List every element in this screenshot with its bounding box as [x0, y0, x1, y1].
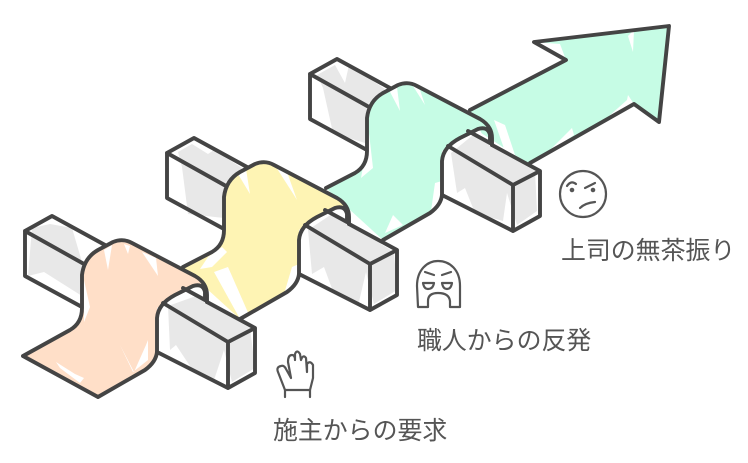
ribbon gaps: [361, 86, 442, 233]
orange step: [23, 216, 255, 397]
back block: [310, 59, 390, 150]
back block: [25, 216, 105, 307]
arrow: [470, 26, 669, 163]
ribbon gaps: [200, 167, 299, 319]
front block: [299, 208, 397, 310]
ribbon fill: [326, 83, 492, 240]
label: craftsmen: 職人からの反発: [417, 327, 591, 355]
label: boss: 上司の無茶振り: [561, 237, 735, 265]
icon: raised hand: [277, 352, 313, 397]
label: client: 施主からの要求: [273, 417, 447, 445]
ribbon fill: [23, 240, 207, 397]
front block: [442, 129, 540, 231]
green step: [310, 59, 540, 240]
icon: frowning face: [560, 171, 606, 217]
ribbon outline: [326, 83, 492, 240]
back block: [167, 138, 247, 229]
front block: [157, 286, 255, 388]
icon: angry mask: [417, 261, 460, 307]
ribbon outline: [183, 162, 349, 319]
yellow step: [167, 138, 397, 319]
ribbon fill: [183, 162, 349, 319]
ribbon outline: [23, 240, 207, 397]
ribbon gaps: [56, 244, 158, 390]
